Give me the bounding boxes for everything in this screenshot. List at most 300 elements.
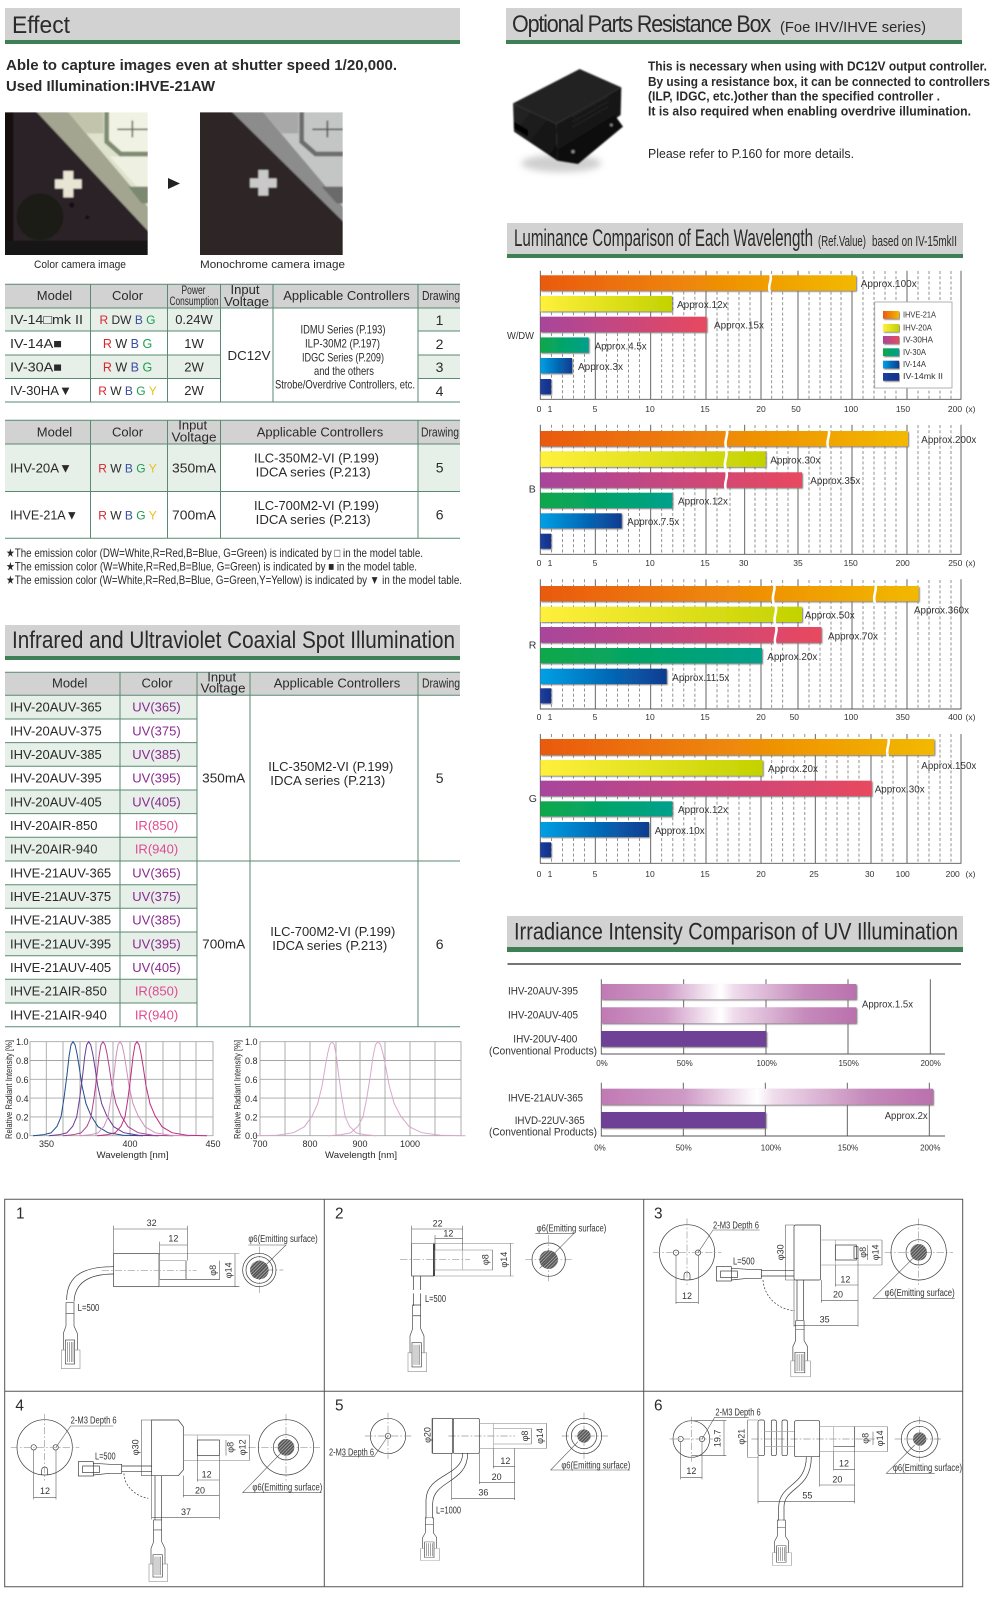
- table body rows: Strobe/Overdrive Controllers, etc.: [275, 377, 415, 391]
- drawing 4: 12: [202, 1469, 212, 1479]
- drawing 2: φ14: [499, 1252, 509, 1268]
- axis labels: [537, 712, 976, 722]
- model column: IHVE-21AUV-365: [10, 865, 111, 880]
- axis labels: 5: [593, 558, 598, 568]
- spectrum curves: [33, 1042, 207, 1136]
- labels: (Conventional Products): [489, 1045, 597, 1057]
- bar labels: Approx.20x: [767, 651, 818, 663]
- drawing 4: φ30: [131, 1439, 141, 1455]
- axis labels: 20: [756, 712, 766, 722]
- bar labels: Approx.20x: [768, 763, 819, 775]
- captions: camera images: Color camera image: [34, 259, 126, 271]
- drawing 6: φ8: [861, 1433, 871, 1444]
- axis labels: 150: [844, 558, 858, 568]
- drawing 5: φ20: [423, 1427, 433, 1443]
- legend: IV-14A: [903, 359, 926, 369]
- table header row: Power: [182, 285, 206, 297]
- table header row: Model: [52, 676, 88, 691]
- bar labels: Approx.7.5x: [627, 516, 680, 528]
- table header row: Model: [37, 288, 72, 303]
- drawing 3: [653, 1205, 955, 1377]
- axis labels: 150: [896, 404, 910, 414]
- axis labels: 100%: [761, 1144, 781, 1153]
- drawing 2: φ8: [480, 1254, 490, 1265]
- table: IV series models: [5, 282, 460, 402]
- labels: IHV-20AUV-395: [508, 985, 578, 997]
- legend: IV-14mk II: [903, 371, 943, 381]
- axis labels: 15: [700, 404, 710, 414]
- chart: UV spectrum: [4, 1037, 221, 1160]
- y axis labels: 0.4: [245, 1094, 258, 1104]
- table body rows: ILC-700M2-VI (P.199): [254, 498, 379, 513]
- drawing 5: L=1000: [436, 1506, 461, 1517]
- merged cells: 700mA: [202, 936, 246, 951]
- y axis labels: [232, 1037, 258, 1141]
- colour column: IR(940): [135, 1007, 178, 1022]
- table header row: Color: [112, 425, 144, 440]
- y axis labels: 0.4: [16, 1094, 29, 1104]
- drawing 4: 4: [15, 1398, 24, 1415]
- drawing 5: 12: [500, 1456, 510, 1466]
- axis labels: 0%: [596, 1059, 608, 1068]
- axis labels: 200: [948, 404, 962, 414]
- captions: camera images: Monochrome camera image: [200, 259, 345, 271]
- drawing 6: 55: [802, 1490, 812, 1500]
- arrow: color to monochrome: [168, 178, 180, 189]
- table body rows: IDCA series (P.213): [256, 512, 371, 527]
- bar labels: Approx.3x: [578, 361, 624, 373]
- drawing 3: 3: [654, 1205, 663, 1222]
- text block: resistance box description: Please refer to P.160 for more details.: [648, 147, 854, 161]
- labels: [489, 1092, 928, 1139]
- chart: IR spectrum: [232, 1037, 466, 1160]
- colour column: UV(375): [132, 723, 181, 738]
- drawing 6: 20: [832, 1475, 842, 1485]
- colour column: UV(375): [132, 889, 181, 904]
- bar labels: Approx.12x: [678, 804, 729, 816]
- table header row: Input: [207, 670, 237, 685]
- x axis labels: [39, 1139, 221, 1160]
- axis labels: 1: [548, 558, 553, 568]
- x axis labels: 900: [352, 1139, 368, 1149]
- merged cells: IDCA series (P.213): [272, 938, 387, 953]
- axis labels: 200%: [920, 1144, 941, 1153]
- notes: emission colour footnotes: ★The emission color (DW=White,R=Red,B=Blue, G=Green) is indicated by □ in the model table.: [6, 546, 423, 560]
- heading: Luminance Comparison of Each Wavelength: Luminance Comparison of Each Wavelength: [514, 225, 813, 252]
- drawing 5: φ14: [535, 1428, 545, 1444]
- notes: emission colour footnotes: ★The emission color (W=White,R=Red,B=Blue, G=Green,Y=Yellow) is indicated by ▼ in the model table.: [6, 573, 462, 587]
- bar labels: B: [529, 484, 536, 496]
- table: UV and IR models: [5, 670, 460, 1027]
- bar labels: W/DW: [507, 330, 534, 342]
- x axis labels: 450: [205, 1139, 221, 1149]
- heading: Optional Parts Resistance Box: [506, 8, 962, 44]
- y axis labels: Relative Radiant Intensity [%]: [4, 1040, 14, 1139]
- drawing 4: 12: [40, 1486, 50, 1496]
- table header row: Voltage: [172, 430, 216, 445]
- chart: G luminance: [529, 734, 977, 879]
- labels: (Conventional Products): [489, 1127, 597, 1139]
- table body rows: 1W: [184, 336, 204, 351]
- bar labels: [507, 278, 917, 373]
- merged cells: ILC-700M2-VI (P.199): [270, 924, 395, 939]
- table body rows: IDCA series (P.213): [256, 465, 371, 480]
- colour column: UV(395): [132, 771, 181, 786]
- y axis labels: Relative Radiant Intensity [%]: [232, 1040, 242, 1139]
- notes: emission colour footnotes: ★The emission color (W=White,R=Red,B=Blue, G=Green) is indicated by ■ in the model table.: [6, 560, 417, 574]
- axis labels: 0: [537, 404, 542, 414]
- axis labels: 20: [756, 869, 766, 879]
- bar labels: Approx.4.5x: [595, 341, 647, 353]
- table header row: Color: [112, 288, 144, 303]
- heading: Optional Parts Resistance Box: (Foe IHV/IHVE series): [780, 19, 926, 36]
- legend: IHVE-21A: [903, 310, 936, 320]
- drawing 2: φ6(Emitting surface): [537, 1223, 606, 1234]
- table body rows: 2W: [184, 383, 204, 398]
- model column: IHV-20AUV-395: [10, 771, 102, 786]
- drawing 6: [654, 1398, 962, 1566]
- x axis labels: 800: [302, 1139, 318, 1149]
- axis labels: [596, 1059, 941, 1068]
- table body rows: 700mA: [172, 508, 216, 523]
- table body rows: IDMU Series (P.193): [300, 322, 386, 336]
- drawing 6: φ14: [875, 1430, 885, 1446]
- model column: IHVE-21AUV-405: [10, 960, 111, 975]
- drawing 3: φ14: [871, 1244, 881, 1260]
- axis labels: 1: [548, 404, 553, 414]
- model column: IHV-20AUV-385: [10, 747, 102, 762]
- table body rows: IHVE-21A▼: [10, 508, 78, 523]
- axis labels: 100: [896, 869, 910, 879]
- y axis labels: 0.0: [245, 1131, 258, 1141]
- table header row: Input: [178, 417, 208, 432]
- merged cells: 5: [436, 770, 444, 786]
- model column: IHV-20AIR-850: [10, 818, 97, 833]
- y axis labels: 1.0: [16, 1037, 29, 1047]
- heading: Luminance Comparison of Each Wavelength: (Ref.Value): [818, 233, 866, 250]
- drawing 5: 5: [335, 1398, 344, 1415]
- table header row: Color: [141, 676, 173, 691]
- drawing 2: 22: [433, 1219, 443, 1229]
- axis labels: 400: [948, 712, 963, 722]
- chart: R luminance: [529, 579, 976, 722]
- axis labels: 15: [700, 558, 710, 568]
- drawing 1: 1: [16, 1205, 25, 1222]
- bar labels: Approx.360x: [914, 605, 970, 617]
- colour column: UV(405): [132, 794, 181, 809]
- legend: IV-30A: [903, 347, 926, 357]
- drawing 6: 19.7: [712, 1430, 722, 1447]
- bar labels: Approx.30x: [770, 454, 821, 466]
- x axis labels: 400: [122, 1139, 138, 1149]
- axis labels: (x): [966, 869, 976, 879]
- axis labels: 1: [548, 869, 553, 879]
- x axis labels: [252, 1139, 420, 1160]
- table header row: Model: [37, 425, 72, 440]
- y axis labels: [4, 1037, 29, 1141]
- axis labels: [537, 558, 976, 568]
- bar labels: [529, 760, 977, 837]
- notes: emission colour footnotes: [6, 546, 462, 587]
- drawing 5: φ8: [520, 1431, 530, 1441]
- table body rows: 4: [436, 383, 444, 399]
- y axis labels: 0.6: [245, 1075, 258, 1085]
- merged cells: ILC-350M2-VI (P.199): [268, 759, 393, 774]
- drawing 4: 20: [195, 1485, 205, 1495]
- drawing 4: 2-M3 Depth 6: [71, 1415, 117, 1426]
- table: IHV / IHVE series models: [5, 417, 460, 538]
- table header row: Consumption: [170, 296, 218, 308]
- bar labels: R: [529, 639, 537, 651]
- axis labels: 50%: [676, 1144, 692, 1153]
- drawing 1: φ14: [224, 1262, 234, 1278]
- table body rows: R W B G Y: [98, 384, 157, 398]
- model column: IHVE-21AUV-385: [10, 913, 111, 928]
- labels: Approx.2x: [885, 1110, 928, 1122]
- legend: [875, 302, 952, 388]
- drawing 6: 12: [686, 1466, 696, 1476]
- drawing 3: φ8: [858, 1247, 868, 1258]
- axis labels: 50: [791, 404, 801, 414]
- labels: IHVD-22UV-365: [515, 1115, 585, 1127]
- table body rows: [10, 312, 444, 399]
- model column: IHV-20AIR-940: [10, 842, 97, 857]
- axis labels: 150%: [838, 1059, 859, 1068]
- y axis labels: 0.8: [245, 1056, 258, 1066]
- table body rows: 350mA: [172, 460, 216, 475]
- colour column: UV(365): [132, 865, 181, 880]
- bar labels: Approx.10x: [655, 825, 705, 837]
- drawing 4: φ12: [238, 1439, 248, 1455]
- colour column: UV(385): [132, 913, 181, 928]
- drawings grid: six dimension drawings: [5, 1199, 963, 1587]
- axis labels: 200: [896, 558, 910, 568]
- drawing 1: 12: [168, 1234, 178, 1244]
- drawing 6: φ21: [737, 1429, 747, 1445]
- table body rows: IV-30HA▼: [10, 383, 72, 398]
- bar labels: Approx.30x: [875, 783, 925, 795]
- bar labels: Approx.15x: [714, 320, 765, 332]
- axis labels: 350: [896, 712, 910, 722]
- table header row: [37, 417, 459, 445]
- drawing 5: φ6(Emitting surface): [561, 1461, 630, 1472]
- text block: effect description: Used Illumination:IHVE-21AW: [6, 78, 216, 95]
- model column: IHV-20AUV-375: [10, 723, 102, 738]
- merged cells: 6: [436, 936, 444, 952]
- table header row: Input: [231, 282, 260, 297]
- bars: [540, 275, 856, 394]
- y axis labels: 0.6: [16, 1075, 29, 1085]
- photo: resistance box: [513, 69, 623, 172]
- table body rows: IHV-20A▼: [10, 460, 72, 475]
- axis labels: 0%: [594, 1144, 606, 1153]
- drawing 5: 36: [478, 1488, 488, 1498]
- bar labels: Approx.150x: [921, 760, 977, 772]
- drawing 4: 37: [181, 1507, 191, 1517]
- table body rows: [10, 451, 444, 527]
- bars: [540, 586, 919, 703]
- heading: Effect: [5, 8, 460, 44]
- heading: Infrared and Ultraviolet Coaxial Spot Illumination: Infrared and Ultraviolet Coaxial Spot Illumination: [12, 627, 455, 654]
- table body rows: 5: [436, 460, 444, 476]
- table body rows: R W B G: [103, 361, 152, 375]
- model column: IHVE-21AUV-375: [10, 889, 111, 904]
- heading: Infrared and Ultraviolet Coaxial Spot Illumination: [5, 625, 460, 660]
- table body rows: 0.24W: [175, 312, 214, 327]
- table body rows: DC12V: [228, 348, 271, 363]
- bar labels: Approx.12x: [678, 496, 729, 508]
- drawing 2: [335, 1205, 606, 1372]
- spectrum curves: [255, 1042, 466, 1136]
- bar labels: Approx.50x: [805, 610, 855, 622]
- table body rows: 2W: [184, 360, 204, 375]
- axis labels: 10: [645, 712, 655, 722]
- drawing 6: 12: [839, 1459, 849, 1469]
- axis labels: 250: [948, 558, 963, 568]
- axis labels: [537, 404, 976, 414]
- model column: IHVE-21AIR-850: [10, 984, 107, 999]
- drawing 1: 32: [147, 1218, 157, 1228]
- axis labels: [594, 1144, 941, 1153]
- y axis labels: 0.0: [16, 1131, 29, 1141]
- labels: [489, 985, 914, 1057]
- table body rows: 1: [436, 312, 444, 328]
- merged cells: [202, 759, 444, 953]
- model column: IHV-20AUV-405: [10, 794, 102, 809]
- text block: resistance box description: [648, 59, 990, 161]
- table body rows: 6: [436, 507, 444, 523]
- axis labels: 5: [593, 869, 598, 879]
- axis labels: 25: [809, 869, 819, 879]
- table header row: Drawing: [422, 288, 460, 303]
- drawing 1: [16, 1205, 318, 1369]
- drawing 6: φ6(Emitting surface): [893, 1463, 962, 1474]
- axis labels: 0: [537, 558, 542, 568]
- table body rows: IV-30A■: [10, 360, 62, 375]
- table header row: Drawing: [422, 676, 460, 691]
- axis labels: 30: [739, 558, 749, 568]
- chart: B luminance: [529, 425, 977, 568]
- bars: [540, 431, 908, 549]
- table body rows: ILP-30M2 (P.197): [305, 336, 380, 350]
- axis labels: (x): [966, 712, 976, 722]
- y axis labels: 0.8: [16, 1056, 29, 1066]
- axis labels: 100%: [756, 1059, 777, 1068]
- text block: effect description: Able to capture images even at shutter speed 1/20,000.: [6, 57, 397, 74]
- legend: IHV-20A: [903, 323, 932, 333]
- axis labels: 200%: [920, 1059, 941, 1068]
- axis labels: 35: [793, 558, 803, 568]
- table body rows: IDGC Series (P.209): [302, 350, 384, 364]
- labels: IHVE-21AUV-365: [508, 1092, 583, 1104]
- labels: IHV-20UV-400: [513, 1034, 577, 1046]
- table body rows: 3: [436, 359, 444, 375]
- bar labels: Approx.200x: [921, 434, 977, 446]
- axis labels: 50: [790, 712, 799, 722]
- table header row: Applicable Controllers: [274, 676, 401, 691]
- text block: effect description: [6, 57, 397, 95]
- chart: irradiance IHV: [489, 979, 945, 1068]
- model column: IHV-20AUV-365: [10, 700, 102, 715]
- axis labels: 15: [700, 869, 710, 879]
- bar labels: Approx.12x: [677, 299, 728, 311]
- legend: IV-30HA: [903, 335, 933, 345]
- table header row: Applicable Controllers: [283, 288, 410, 303]
- drawing 3: 12: [682, 1291, 692, 1301]
- colour column: [132, 700, 181, 1022]
- table body rows: R W B G Y: [98, 509, 157, 523]
- y axis labels: 1.0: [245, 1037, 258, 1047]
- chart: irradiance IHVE: [489, 1083, 945, 1153]
- heading: Optional Parts Resistance Box: Optional Parts Resistance Box: [512, 11, 771, 38]
- bar labels: Approx.35x: [810, 475, 861, 487]
- axis labels: 0: [537, 869, 542, 879]
- table body rows: IV-14□mk II: [10, 312, 83, 327]
- bars: [601, 1089, 933, 1128]
- drawing 4: φ6(Emitting surface): [252, 1482, 322, 1493]
- model column: IHVE-21AIR-940: [10, 1007, 107, 1022]
- axis labels: 20: [756, 404, 766, 414]
- model column: IHVE-21AUV-395: [10, 936, 111, 951]
- bars: [601, 984, 856, 1047]
- table header row: Applicable Controllers: [257, 425, 384, 440]
- drawing 3: φ6(Emitting surface): [885, 1288, 955, 1299]
- photo: monochrome camera image: [200, 112, 343, 255]
- text block: resistance box description: It is also required when enabling overdrive illumination.: [648, 104, 971, 119]
- drawing 3: L=500: [733, 1257, 755, 1268]
- merged cells: 350mA: [202, 771, 246, 786]
- drawing 6: 2-M3 Depth 6: [715, 1408, 761, 1419]
- axis labels: 150%: [838, 1144, 858, 1153]
- merged cells: IDCA series (P.213): [270, 773, 385, 788]
- axis labels: 30: [865, 869, 875, 879]
- bar labels: Approx.100x: [861, 278, 917, 290]
- drawing 4: φ8: [225, 1442, 235, 1453]
- axis labels: 100: [844, 404, 858, 414]
- axis labels: 10: [645, 404, 655, 414]
- colour column: UV(365): [132, 700, 181, 715]
- colour column: IR(940): [135, 842, 178, 857]
- labels: IHV-20AUV-405: [508, 1009, 578, 1021]
- drawing 1: φ8: [208, 1265, 218, 1276]
- bar labels: G: [529, 793, 537, 805]
- table header row: Voltage: [200, 681, 246, 696]
- table body rows: ILC-350M2-VI (P.199): [254, 451, 379, 466]
- table body rows: R DW B G: [99, 313, 156, 327]
- bars: [540, 739, 934, 857]
- drawing 4: [11, 1398, 322, 1581]
- drawing 5: 20: [492, 1472, 502, 1482]
- drawing 5: 2-M3 Depth 6: [329, 1448, 374, 1459]
- drawing 4: L=500: [95, 1452, 116, 1463]
- table body rows: R W B G Y: [98, 461, 157, 475]
- axis labels: (x): [966, 558, 976, 568]
- axis labels: 10: [645, 558, 655, 568]
- axis labels: 50%: [677, 1059, 693, 1068]
- axis labels: 200: [946, 869, 960, 879]
- colour column: UV(385): [132, 747, 181, 762]
- photo: color camera image: [5, 112, 148, 255]
- labels: Approx.1.5x: [862, 998, 914, 1010]
- bar labels: [529, 434, 977, 528]
- model column: [10, 700, 111, 1022]
- chart: W/DW luminance: [507, 271, 976, 414]
- drawing 1: φ6(Emitting surface): [248, 1234, 318, 1245]
- x axis labels: Wavelength [nm]: [325, 1150, 397, 1160]
- drawing 3: 35: [820, 1315, 830, 1325]
- drawing 3: φ30: [775, 1244, 785, 1260]
- colour column: UV(395): [132, 936, 181, 951]
